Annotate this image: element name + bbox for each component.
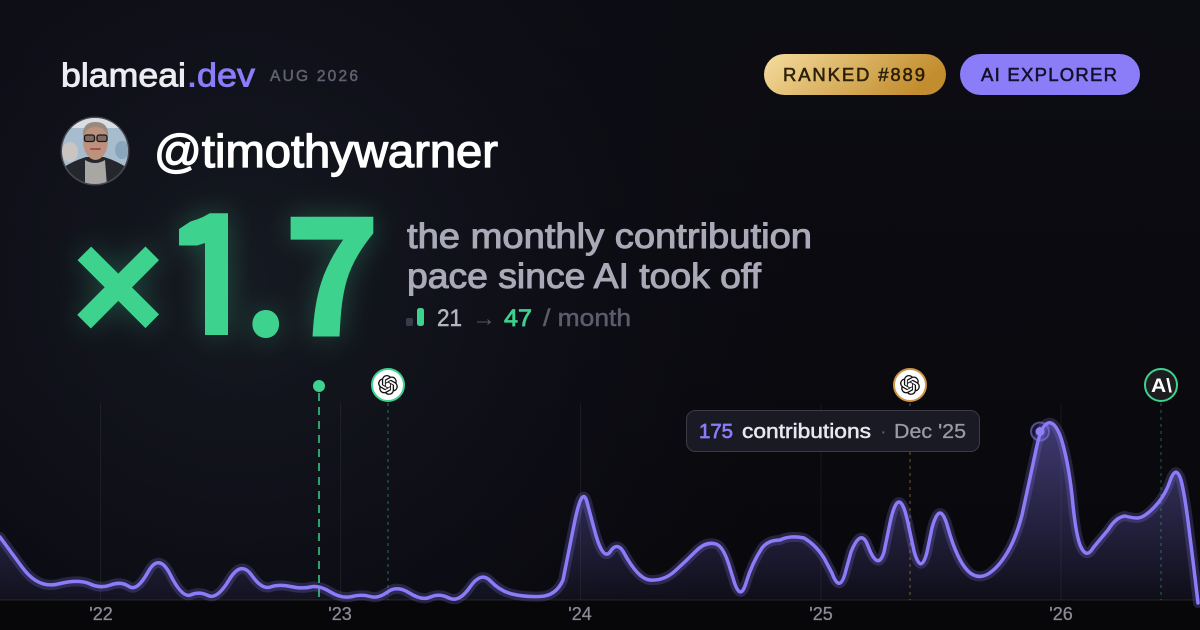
pace comparison: / month (543, 305, 631, 332)
badge: rank (764, 54, 946, 95)
hero multiplier: . (242, 168, 289, 379)
baseline (0, 599, 1200, 601)
x-axis labels: '23 (328, 604, 352, 624)
hero multiplier: 7 (284, 147, 380, 382)
pace comparison: → (472, 305, 496, 332)
badge: AI explorer: AI EXPLORER (981, 64, 1117, 85)
brand logo (61, 56, 256, 94)
brand logo: blameai (61, 56, 186, 94)
x-axis labels (89, 604, 1073, 624)
marker: Anthropic release: A\ (1151, 376, 1173, 397)
x-axis labels: '25 (809, 604, 833, 624)
hero multiplier: 7 (284, 147, 380, 382)
hero multiplier: . (242, 168, 289, 379)
tooltip: · (880, 421, 887, 443)
x-axis labels: '22 (89, 604, 113, 624)
x-axis labels: '24 (568, 604, 592, 624)
username: @timothywarner (154, 125, 498, 177)
hero multiplier: × (72, 198, 164, 374)
peak point (1031, 422, 1049, 440)
brand logo: .dev (187, 56, 256, 94)
contribution line (0, 423, 1198, 603)
pace comparison (406, 305, 631, 332)
x-axis labels: '26 (1049, 604, 1073, 624)
line halo (0, 423, 1198, 603)
hero multiplier (74, 202, 382, 346)
pace comparison: 21 (437, 305, 462, 332)
marker: OpenAI release early (372, 369, 404, 600)
date label: AUG 2026 (270, 68, 358, 85)
area fill (0, 423, 1198, 603)
tooltip: contributions (742, 421, 871, 443)
hero multiplier: 1 (165, 146, 262, 383)
hero multiplier: × (72, 198, 164, 374)
marker: Anthropic release (1145, 369, 1177, 600)
contribution chart (0, 369, 1200, 630)
headline: the monthly contribution (407, 217, 812, 256)
tooltip: Dec '25 (894, 421, 966, 443)
marker: AI takeoff line (313, 380, 325, 600)
tooltip: 175 (699, 421, 733, 443)
badge: rank: RANKED #889 (783, 64, 925, 85)
badge: AI explorer (960, 54, 1140, 95)
tooltip (686, 410, 980, 452)
pace comparison: 47 (504, 305, 532, 332)
avatar (60, 116, 130, 186)
headline (407, 217, 812, 296)
headline: pace since AI took off (407, 257, 761, 296)
marker: OpenAI release late (894, 369, 926, 600)
mini bars (406, 308, 424, 326)
hero multiplier: 1 (165, 146, 262, 383)
